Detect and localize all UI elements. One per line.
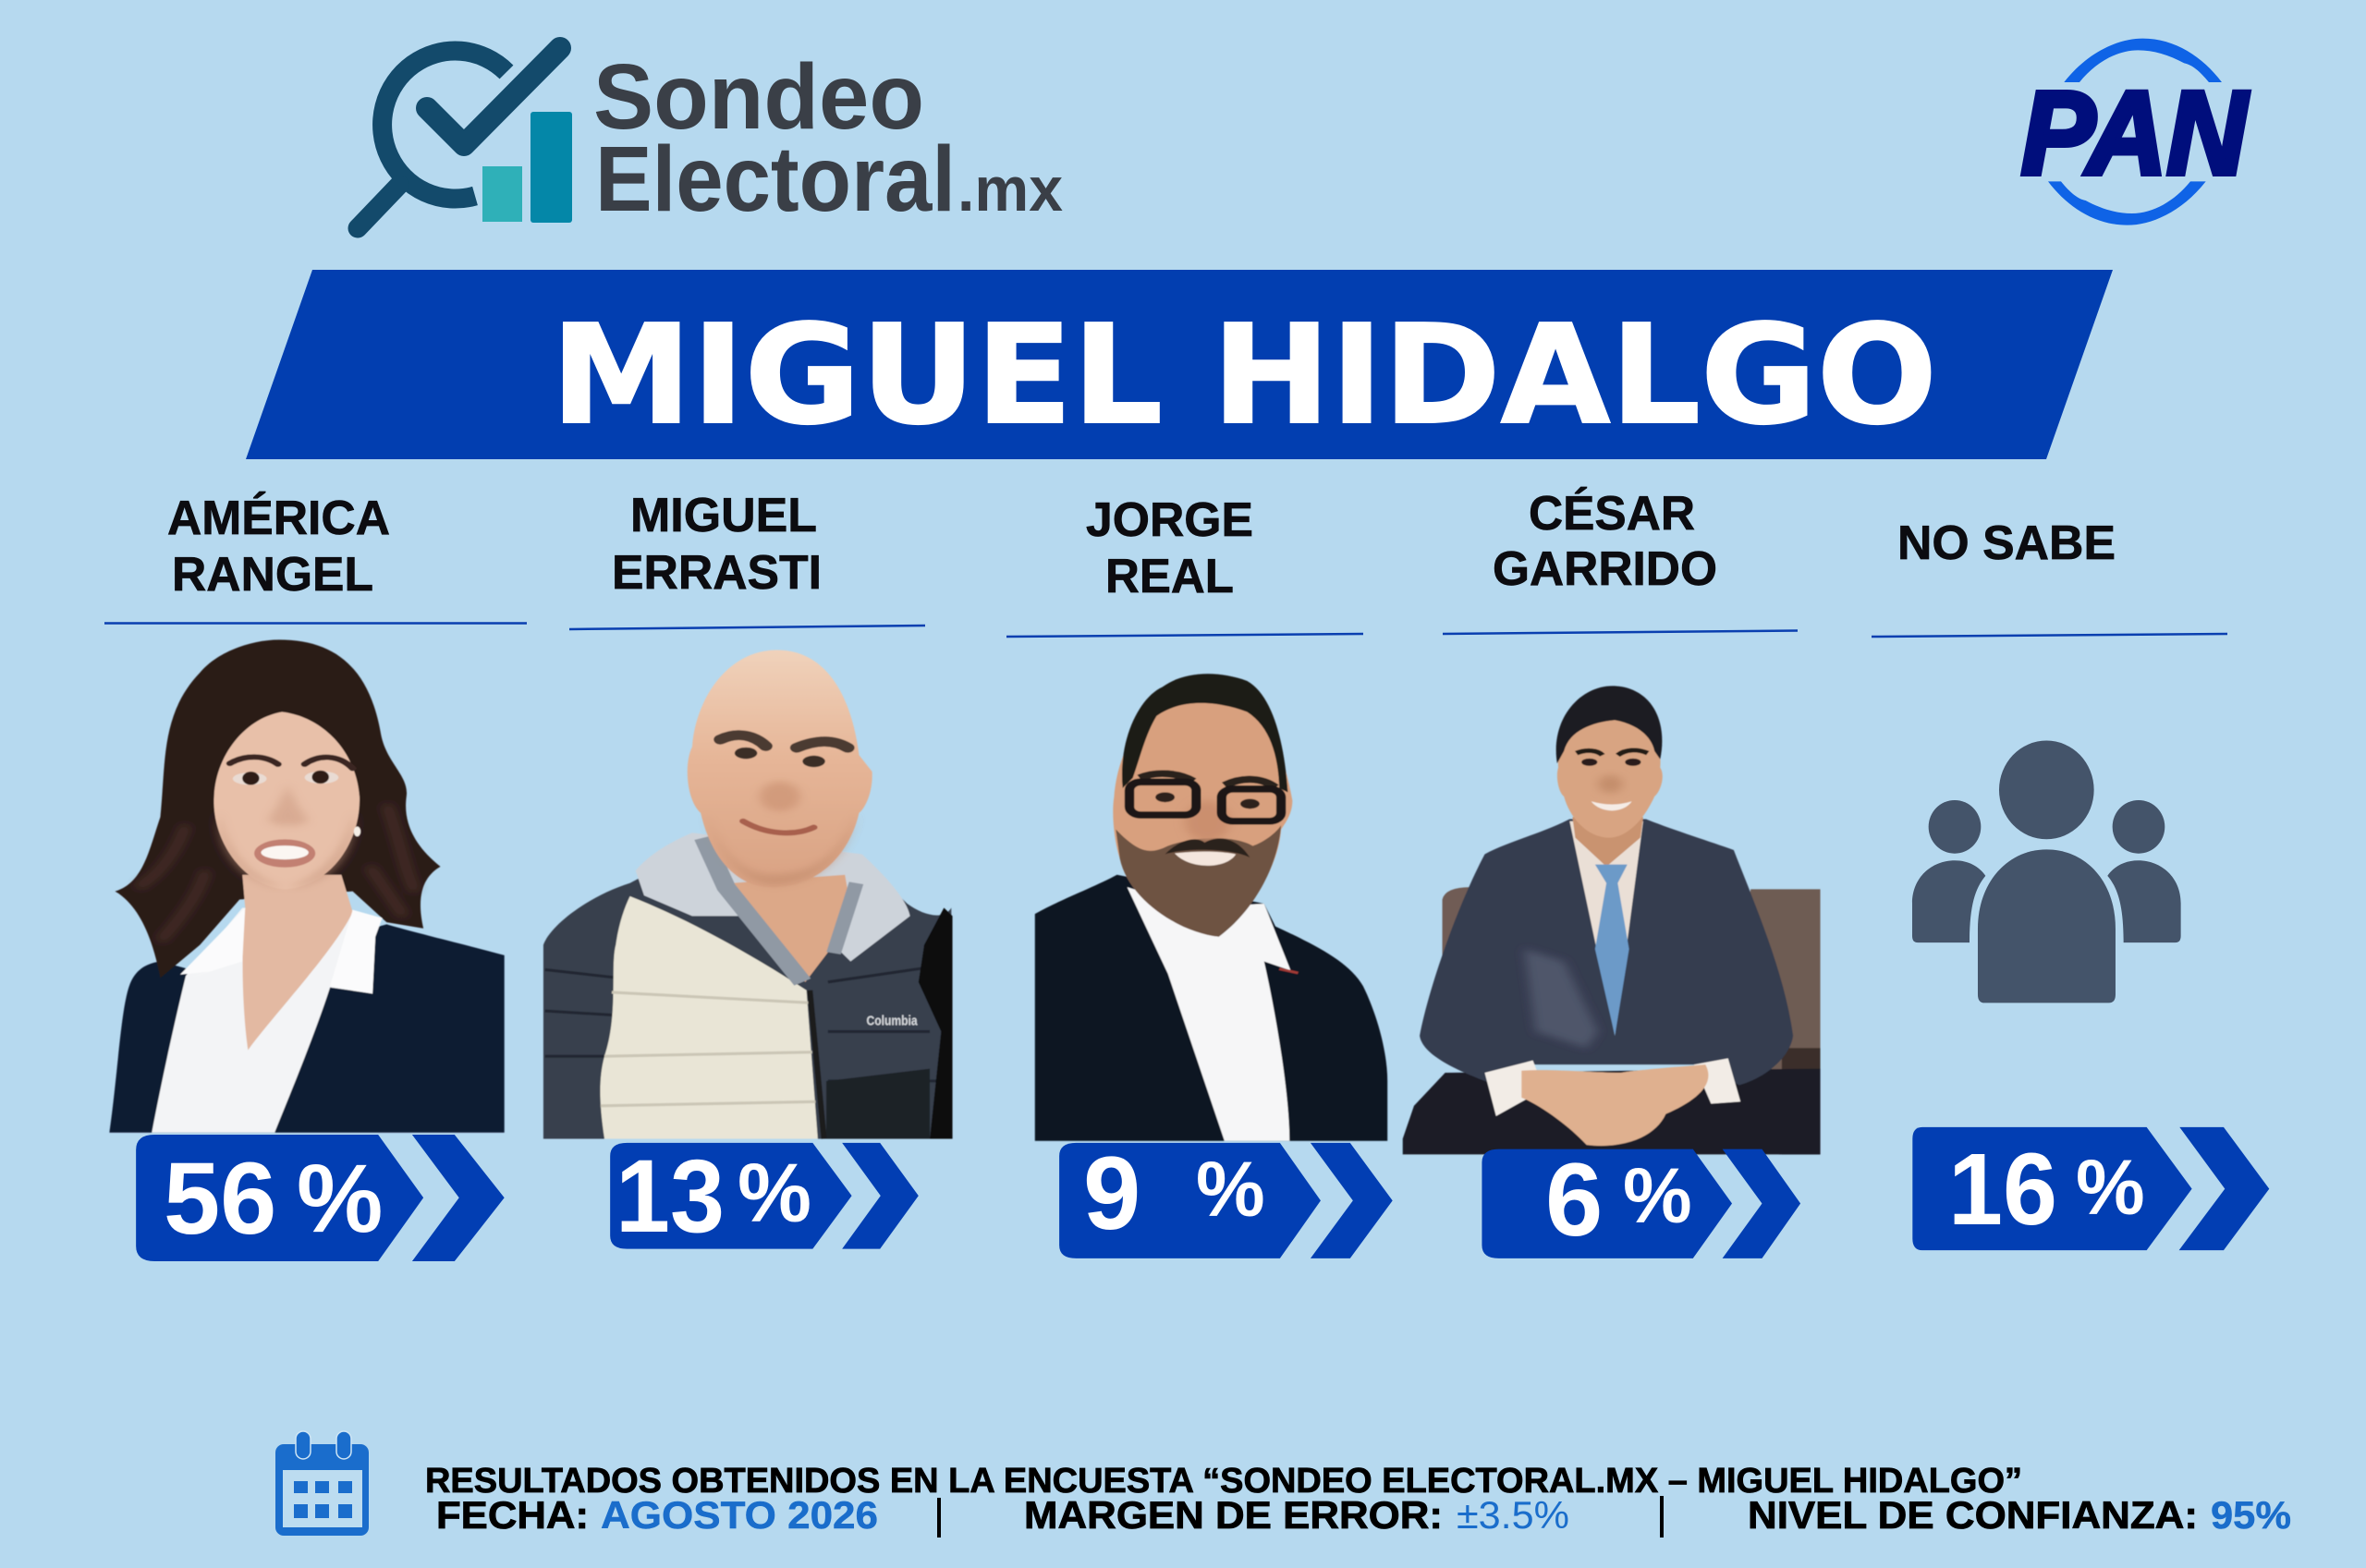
candidate name: No sabe (1872, 517, 2227, 637)
candidate name: César Garrido: CÉSAR (1529, 487, 1695, 541)
icon: group of people, no sabe (1912, 741, 2181, 1003)
title banner: MIGUEL HIDALGO (551, 296, 1937, 455)
percent arrow: 13% (610, 1138, 919, 1254)
footer: survey source line: RESULTADOS OBTENIDOS EN LA ENCUESTA “SONDEO ELECTORAL.MX – MIGUEL HIDALGO” (425, 1462, 2022, 1501)
percent arrow: 6% (1482, 1142, 1800, 1258)
candidate name: Miguel Errasti (569, 489, 925, 629)
logo: PAN: PAN (2021, 67, 2249, 200)
percent arrow: 6%: % (1623, 1152, 1692, 1239)
logo: Sondeo Electoral.mx (358, 45, 1063, 231)
candidate name: América Rangel (104, 492, 527, 623)
candidate name: César Garrido: GARRIDO (1493, 542, 1717, 596)
footer: date, margin of error, confidence: NIVEL DE CONFIANZA: (1748, 1493, 2198, 1537)
candidate name: América Rangel: AMÉRICA (167, 492, 390, 545)
percent arrow: 13%: 13 (616, 1138, 725, 1254)
candidate name: Jorge Real (1006, 493, 1363, 637)
percent arrow: 6%: 6 (1545, 1142, 1603, 1258)
percent arrow: 16% (1912, 1127, 2269, 1250)
candidate name: No sabe: NO SABE (1897, 517, 2116, 570)
logo: PAN (2021, 39, 2249, 225)
candidate name: César Garrido (1443, 487, 1798, 634)
icon: calendar (275, 1431, 369, 1536)
candidate name: Jorge Real: JORGE (1086, 493, 1253, 547)
logo wordmark: Electoral (595, 128, 956, 231)
portrait: César Garrido (1403, 686, 1821, 1154)
footer: date, margin of error, confidence: 95% (2211, 1493, 2291, 1537)
percent arrow: 9% (1059, 1136, 1393, 1258)
percent arrow: 16%: 16 (1948, 1133, 2057, 1246)
footer: date, margin of error, confidence: AGOSTO 2026 (601, 1493, 878, 1537)
logo wordmark (593, 45, 1063, 231)
candidate name: América Rangel: RANGEL (172, 548, 373, 602)
title banner (246, 270, 2113, 459)
footer: date, margin of error, confidence: FECHA: (436, 1493, 589, 1537)
candidate name: Jorge Real: REAL (1105, 550, 1234, 603)
percent arrow: 13%: % (738, 1148, 811, 1240)
candidate name: Miguel Errasti: ERRASTI (612, 546, 822, 600)
logo wordmark: .mx (957, 154, 1063, 225)
logo wordmark: Sondeo (593, 45, 924, 149)
icon: magnifier with check and bars (358, 48, 572, 228)
portrait: Jorge Real (1035, 674, 1387, 1141)
percent arrow: 56%: 56 (164, 1142, 276, 1256)
percent arrow: 56%: % (297, 1145, 383, 1253)
portrait: América Rangel (109, 639, 505, 1133)
footer: date, margin of error, confidence (436, 1493, 2291, 1538)
portrait: Miguel Errasti (543, 650, 953, 1138)
footer: date, margin of error, confidence: ±3.5% (1457, 1493, 1569, 1537)
footer: date, margin of error, confidence: MARGEN DE ERROR: (1024, 1493, 1443, 1537)
percent arrow: 9%: 9 (1083, 1136, 1140, 1251)
candidate name: Miguel Errasti: MIGUEL (630, 489, 817, 542)
percent arrow: 56% (136, 1135, 505, 1261)
percent arrow: 16%: % (2076, 1144, 2145, 1231)
percent arrow: 9%: % (1196, 1146, 1265, 1233)
portrait: Miguel Errasti: Columbia (866, 1013, 918, 1028)
